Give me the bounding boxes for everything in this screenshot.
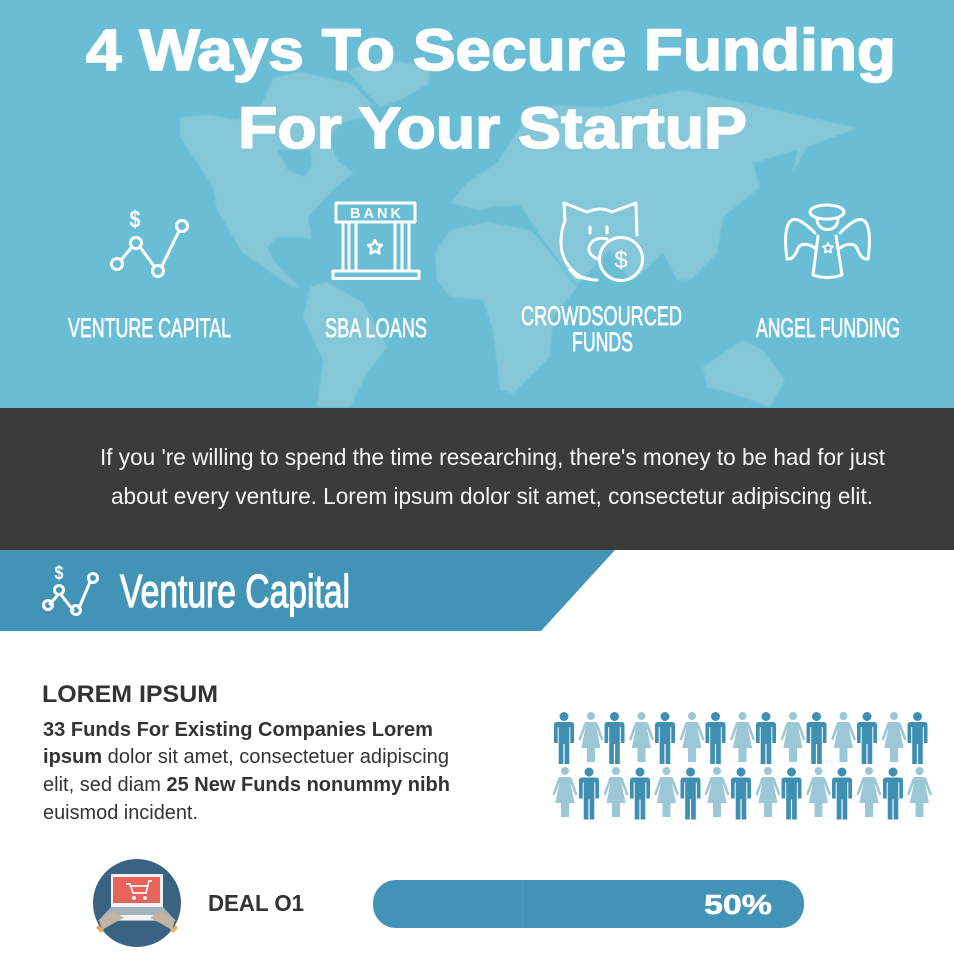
hero banner background — [0, 0, 954, 408]
icon: laptop shopping cart — [93, 859, 181, 947]
section header: venture capital: Venture Capital — [120, 565, 350, 617]
label: deal 01: DEAL O1 — [208, 890, 304, 916]
title: 4 Ways To Secure Funding — [86, 18, 896, 83]
icon: venture capital chart — [112, 206, 188, 276]
intro panel — [0, 408, 954, 550]
label: crowdsourced funds: CROWDSOURCED — [521, 301, 682, 331]
title — [86, 18, 896, 161]
progress bar — [373, 880, 804, 928]
intro panel: If you 're willing to spend the time researching, there's money to be had for just — [100, 444, 886, 470]
people pictogram — [552, 712, 932, 820]
icon: venture capital chart: $ — [130, 206, 141, 233]
section header: venture capital — [0, 550, 615, 631]
label: crowdsourced funds — [521, 301, 682, 357]
icon: section chart — [44, 563, 98, 614]
icon: piggy bank with coin: $ — [614, 247, 628, 274]
progress bar: 50% — [704, 889, 772, 920]
icon: bank — [333, 203, 419, 278]
body text: ipsum dolor sit amet, consectetuer adipiscing — [43, 746, 449, 768]
body text: euismod incident. — [43, 802, 198, 824]
label: venture capital: VENTURE CAPITAL — [68, 313, 231, 343]
body text — [43, 719, 450, 824]
icon: angel — [786, 205, 869, 278]
world map — [180, 60, 857, 407]
subheading: LOREM IPSUM — [42, 681, 218, 708]
body text: elit, sed diam 25 New Funds nonummy nibh — [43, 774, 450, 796]
label: SBA loans: SBA LOANS — [325, 313, 427, 343]
intro panel: about every venture. Lorem ipsum dolor sit amet, consectetur adipiscing elit. — [111, 483, 873, 509]
label: crowdsourced funds: FUNDS — [572, 327, 633, 357]
title: For Your StartuP — [238, 96, 747, 161]
icon: bank: BANK — [350, 206, 402, 222]
body text: 33 Funds For Existing Companies Lorem — [43, 719, 433, 741]
icon: section chart: $ — [54, 563, 64, 584]
icon: piggy bank with coin — [561, 203, 642, 280]
